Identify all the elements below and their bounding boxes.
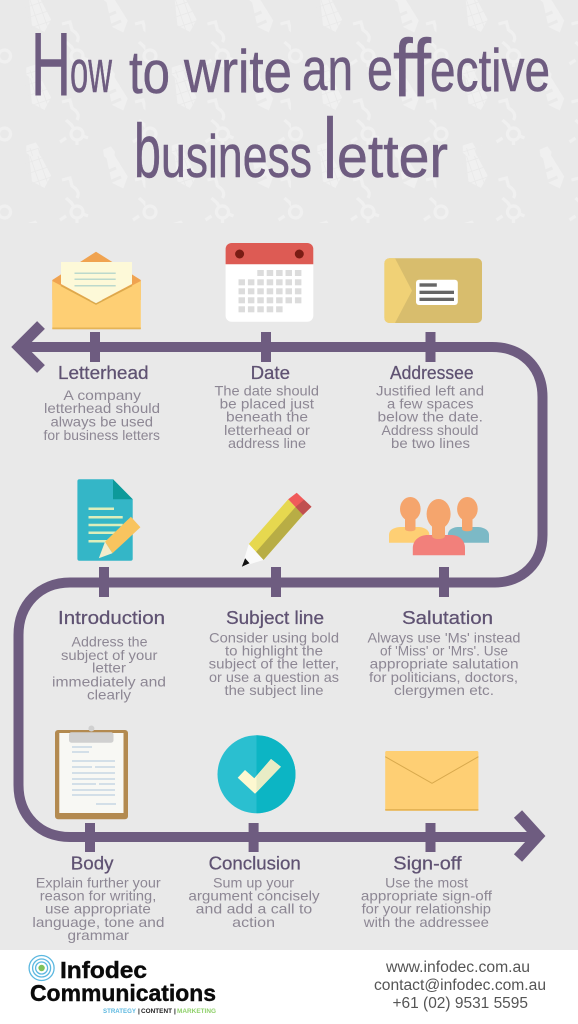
title: to bbox=[129, 39, 170, 106]
title bbox=[31, 15, 550, 197]
description: Use the most bbox=[385, 874, 468, 890]
description: action bbox=[232, 914, 275, 930]
description: Address should bbox=[382, 422, 478, 438]
background tie pattern bbox=[0, 0, 578, 223]
logo bbox=[29, 956, 216, 1015]
heading: Conclusion bbox=[209, 853, 301, 873]
icon: addressed envelope bbox=[384, 258, 482, 323]
description: always be used bbox=[50, 414, 153, 430]
description bbox=[214, 383, 319, 451]
description: be placed just bbox=[220, 396, 314, 412]
heading: Salutation bbox=[402, 608, 493, 628]
description: beneath the bbox=[226, 409, 308, 425]
tagline: MARKETING bbox=[177, 1008, 216, 1015]
icon: pencil bbox=[242, 493, 312, 567]
description: or use a question as bbox=[209, 669, 339, 685]
description bbox=[209, 629, 339, 698]
tagline: | bbox=[138, 1008, 140, 1015]
tagline: | bbox=[174, 1008, 176, 1015]
step: Body bbox=[32, 726, 164, 943]
heading: Sign-off bbox=[393, 853, 463, 873]
description: address line bbox=[228, 435, 306, 451]
description: be two lines bbox=[391, 435, 470, 451]
description: letterhead or bbox=[224, 422, 310, 438]
description: and add a call to bbox=[196, 901, 312, 917]
description: below the date. bbox=[378, 409, 483, 425]
description: clearly bbox=[87, 686, 131, 702]
timeline arrow bbox=[18, 325, 542, 858]
icon: closed envelope bbox=[385, 751, 478, 811]
title: etter bbox=[337, 123, 448, 190]
title: H bbox=[31, 15, 71, 115]
description: reason for writing, bbox=[40, 888, 156, 904]
icon: concentric circles bbox=[29, 956, 54, 980]
description bbox=[52, 634, 166, 702]
description: Sum up your bbox=[213, 874, 294, 890]
contact details bbox=[374, 959, 546, 1012]
step: Date bbox=[214, 243, 319, 451]
description: A company bbox=[63, 387, 141, 403]
title: write bbox=[183, 38, 292, 105]
step: Introduction bbox=[52, 479, 166, 702]
title: an bbox=[302, 36, 353, 103]
description: argument concisely bbox=[188, 888, 320, 904]
title: usiness bbox=[161, 123, 312, 190]
description: appropriate sign-off bbox=[361, 888, 492, 904]
description: grammar bbox=[68, 927, 129, 943]
title: ff bbox=[393, 23, 431, 114]
title: b bbox=[134, 109, 161, 194]
title: ow bbox=[70, 38, 112, 105]
heading: Addressee bbox=[390, 363, 474, 383]
description: clergymen etc. bbox=[394, 682, 494, 698]
description bbox=[361, 874, 492, 930]
description: for your relationship bbox=[362, 901, 491, 917]
description: letter bbox=[92, 660, 126, 676]
description: a few spaces bbox=[387, 396, 474, 412]
description: Address the bbox=[72, 634, 148, 650]
description: subject of your bbox=[61, 647, 158, 663]
icon: clipboard bbox=[55, 726, 128, 819]
logo: Communications bbox=[30, 980, 216, 1006]
icon: open envelope bbox=[52, 252, 141, 329]
title: e bbox=[367, 36, 393, 103]
description bbox=[44, 387, 160, 443]
icon: document and pencil bbox=[77, 479, 140, 561]
description: The date should bbox=[214, 383, 319, 399]
tagline: CONTENT bbox=[141, 1008, 172, 1015]
description: appropriate salutation bbox=[370, 656, 519, 672]
step: Addressee bbox=[376, 258, 484, 451]
description bbox=[32, 874, 164, 943]
footer bbox=[0, 950, 578, 1024]
contact details: contact@infodec.com.au bbox=[374, 977, 546, 994]
description: with the addressee bbox=[363, 914, 489, 930]
title: l bbox=[323, 102, 337, 197]
heading: Date bbox=[251, 363, 290, 383]
description: Consider using bold bbox=[209, 629, 339, 645]
step: Subject line bbox=[209, 493, 339, 698]
step: Conclusion bbox=[188, 735, 320, 930]
icon: three people bbox=[389, 497, 489, 555]
description: for business letters bbox=[44, 427, 160, 443]
logo: Infodec bbox=[60, 957, 147, 983]
heading: Subject line bbox=[226, 608, 324, 628]
description: letterhead should bbox=[44, 400, 160, 416]
description bbox=[376, 383, 484, 451]
description: Justified left and bbox=[376, 383, 484, 399]
description: Explain further your bbox=[36, 874, 161, 890]
heading: Introduction bbox=[58, 608, 165, 628]
description: of 'Miss' or 'Mrs'. Use bbox=[380, 643, 508, 659]
contact details: www.infodec.com.au bbox=[385, 959, 530, 976]
description: Always use 'Ms' instead bbox=[368, 629, 520, 645]
contact details: +61 (02) 9531 5595 bbox=[392, 995, 528, 1012]
tagline: STRATEGY bbox=[103, 1008, 137, 1015]
heading: Letterhead bbox=[58, 363, 148, 383]
description: language, tone and bbox=[32, 914, 164, 930]
step: Salutation bbox=[368, 497, 520, 698]
step: Letterhead bbox=[44, 252, 160, 443]
description bbox=[368, 629, 520, 698]
heading: Body bbox=[71, 853, 114, 873]
icon: calendar bbox=[226, 243, 313, 322]
description: use appropriate bbox=[45, 901, 151, 917]
description: the subject line bbox=[224, 682, 324, 698]
description bbox=[188, 874, 320, 930]
step: Sign-off bbox=[361, 751, 492, 930]
description: immediately and bbox=[52, 674, 166, 690]
description: to highlight the bbox=[225, 643, 323, 659]
description: for politicians, doctors, bbox=[369, 669, 518, 685]
description: subject of the letter, bbox=[209, 656, 339, 672]
icon: check mark circle bbox=[218, 735, 296, 813]
